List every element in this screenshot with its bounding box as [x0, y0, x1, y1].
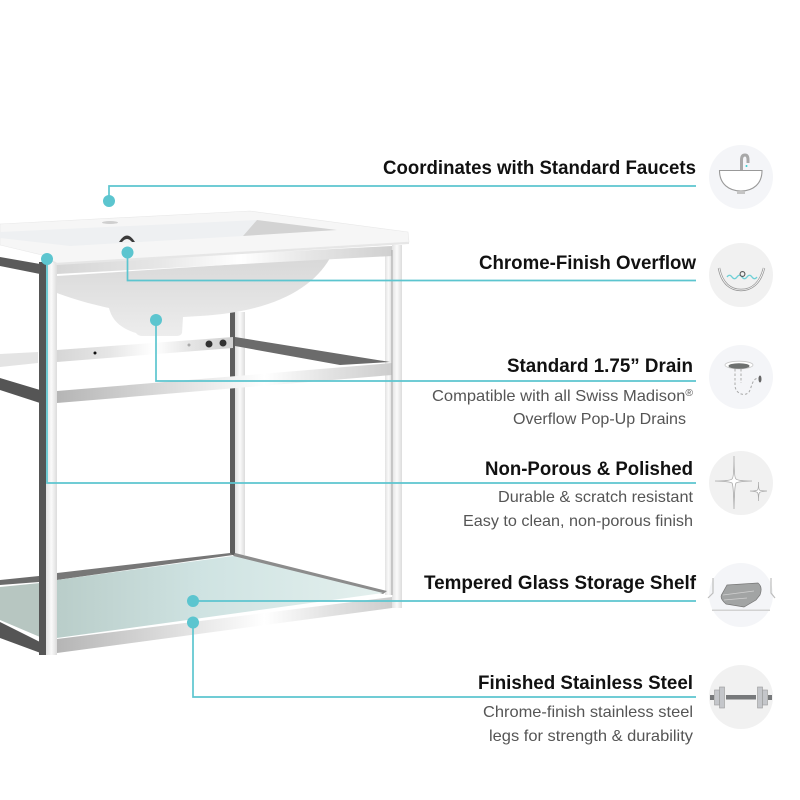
description: Overflow Pop-Up Drains — [513, 411, 686, 428]
description: Durable & scratch resistant — [498, 489, 694, 506]
side middle rails — [0, 337, 390, 403]
description: legs for strength & durability — [489, 728, 693, 745]
icon: drain and pipe — [709, 345, 773, 409]
left side top rail — [0, 257, 40, 274]
description — [483, 704, 693, 745]
feature: finished stainless steel — [478, 665, 773, 745]
product photo: vanity with sink and glass shelf — [0, 211, 409, 655]
icon: bowl with water and overflow — [709, 243, 773, 307]
rear middle rail — [0, 337, 233, 367]
front top rail — [57, 246, 392, 274]
leader: drain — [150, 314, 696, 381]
feature: chrome-finish overflow — [479, 243, 773, 307]
heading: Tempered Glass Storage Shelf — [424, 572, 696, 594]
countertop — [0, 211, 409, 265]
tempered glass shelf — [57, 556, 383, 638]
front left leg — [39, 262, 57, 655]
left glass shelf section — [0, 576, 46, 655]
feature: standard drain — [432, 345, 773, 428]
leader: non-porous — [41, 253, 696, 483]
front bottom rail — [57, 597, 392, 653]
leader: overflow — [122, 246, 696, 280]
description: ® — [685, 388, 694, 399]
description — [432, 388, 694, 428]
heading: Non-Porous & Polished — [485, 458, 693, 480]
rear and side shelf rails — [57, 553, 387, 594]
heading: Coordinates with Standard Faucets — [383, 157, 696, 179]
heading: Finished Stainless Steel — [478, 672, 693, 694]
heading: Chrome-Finish Overflow — [479, 252, 697, 274]
callout leader lines — [41, 186, 696, 697]
front right leg — [392, 245, 402, 608]
leader: faucets — [103, 186, 696, 207]
rear center leg — [230, 312, 245, 555]
leader: stainless steel — [187, 616, 696, 697]
description: Easy to clean, non-porous finish — [463, 513, 693, 530]
feature: coordinates with standard faucets — [383, 145, 773, 209]
description — [463, 489, 694, 530]
feature: tempered glass storage shelf — [424, 563, 775, 627]
heading: Standard 1.75” Drain — [507, 355, 693, 377]
icon: sink with faucet — [709, 145, 773, 209]
icon: sparkles — [709, 451, 773, 515]
sink basin underside — [57, 258, 330, 336]
icon: towels on shelf — [708, 563, 775, 627]
rear right leg — [385, 250, 392, 595]
front middle rail — [57, 363, 392, 403]
feature: non-porous and polished — [463, 451, 773, 530]
description: Chrome-finish stainless steel — [483, 704, 693, 721]
description: Compatible with all Swiss Madison — [432, 388, 677, 405]
icon: dumbbell — [709, 665, 773, 729]
leader: glass shelf — [187, 595, 696, 607]
